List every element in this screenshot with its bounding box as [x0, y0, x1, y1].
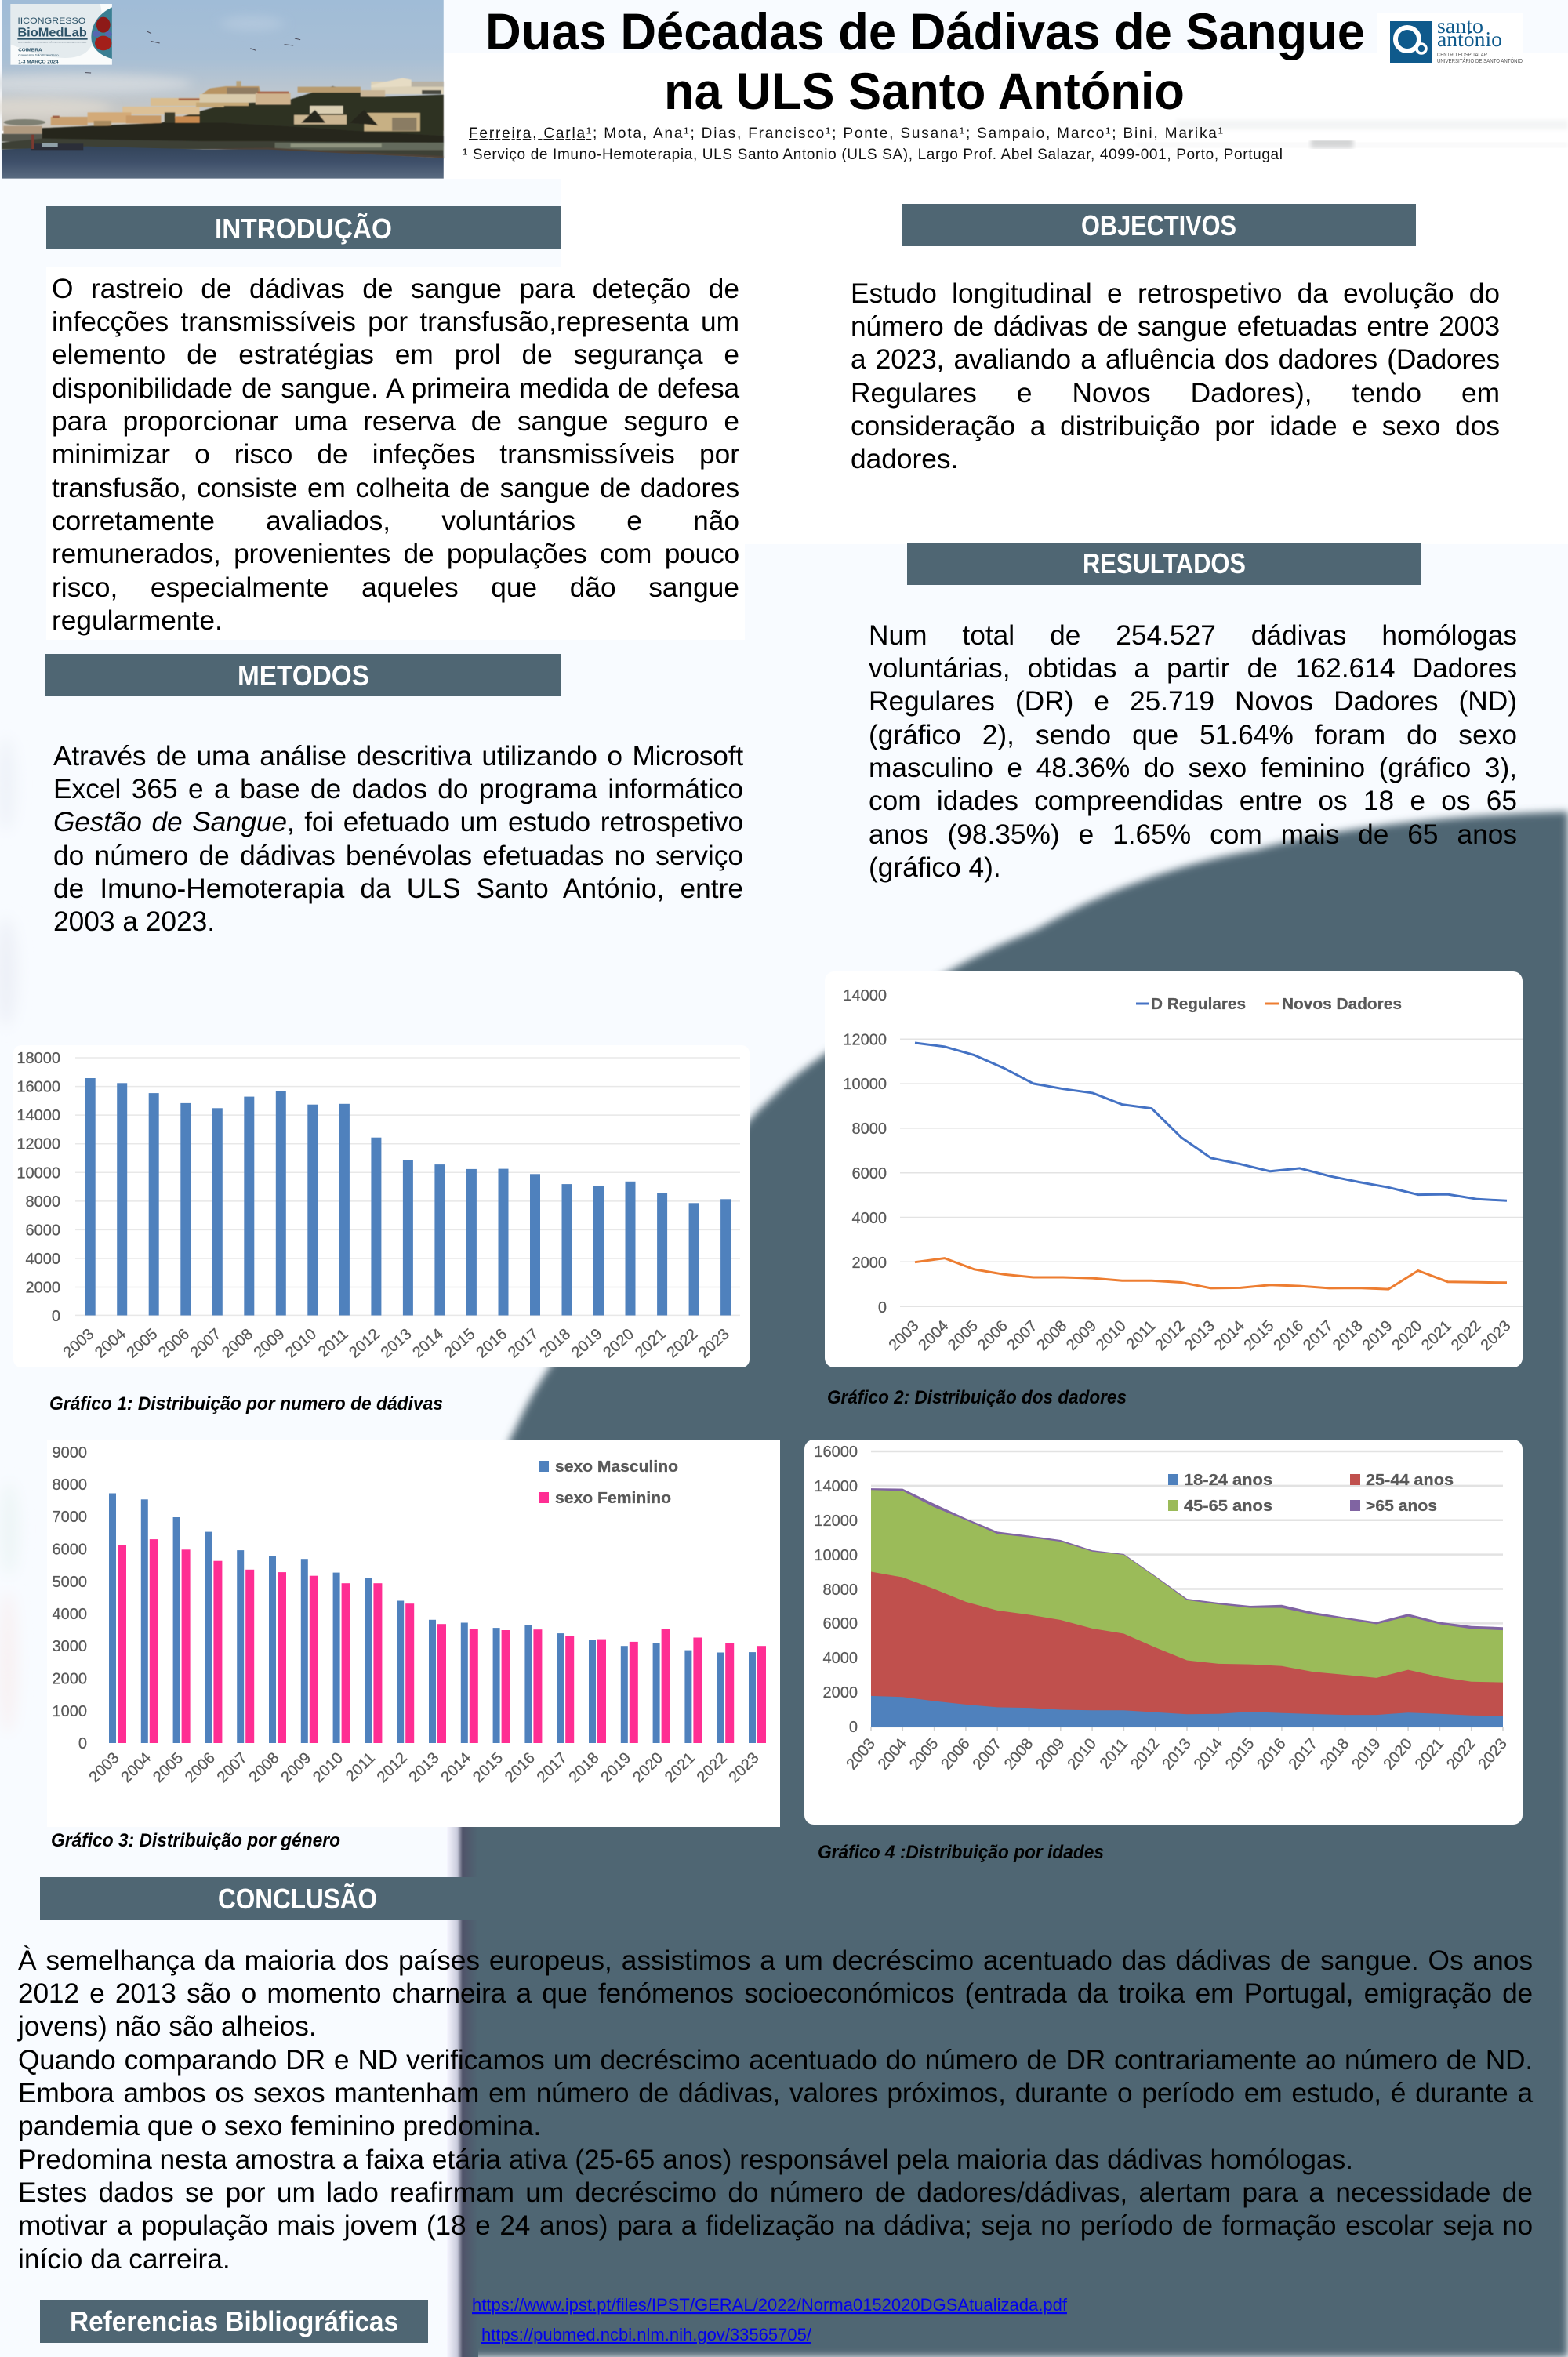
heading: Conclusão	[40, 1877, 472, 1920]
stacked area chart: Gráfico 4 age groups: 2021	[1412, 1735, 1447, 1773]
grouped bar chart: Gráfico 3 gender: 2007	[214, 1749, 251, 1786]
grouped bar chart: Gráfico 3 gender: 2004	[118, 1749, 154, 1786]
authors and affiliation: ¹ Serviço de Imuno-Hemoterapia, ULS Santo Antonio (ULS SA), Largo Prof. Abel Salazar, 4099-001, Porto, Portugal	[463, 147, 1283, 163]
text block: Metodos: do número de dádivas benévolas efetuadas no serviço	[53, 841, 743, 871]
legend	[1168, 1472, 1454, 1515]
stacked area chart: Gráfico 4 age groups: 2016	[1254, 1735, 1290, 1773]
text block: Objectivos: a 2023, avaliando a afluência dos dadores (Dadores	[851, 344, 1500, 375]
stacked area chart: Gráfico 4 age groups: 2013	[1159, 1735, 1195, 1773]
text block: Resultados: com idades compreendidas entre os 18 e os 65	[869, 786, 1517, 816]
grouped bar chart: Gráfico 3 gender: 2016	[502, 1749, 539, 1786]
stacked area chart: Gráfico 4 age groups: 2003	[843, 1735, 879, 1773]
text block: Conclusão: jovens) não são alheios.	[18, 2011, 317, 2042]
legend: sexo Masculino	[555, 1458, 678, 1476]
text block: Introdução: elemento de estratégias em prol de segurança e	[52, 340, 739, 370]
bar chart: Gráfico 1 donations per year: 8000	[25, 1193, 60, 1211]
text block: Introdução: infecções transmissíveis por transfusão,representa um	[52, 307, 739, 337]
text block: Objectivos: Estudo longitudinal e retrospetivo da evolução do	[851, 278, 1500, 309]
grouped bar chart: Gráfico 3 gender: 2010	[310, 1749, 347, 1786]
congress logo: IICONGRESSO	[17, 16, 85, 26]
legend: sexo Feminino	[555, 1490, 671, 1507]
bar chart: Gráfico 1 donations per year: 2022	[663, 1325, 701, 1361]
bar chart: Gráfico 1 donations per year: 2012	[346, 1325, 383, 1361]
line chart: Gráfico 2 donors: 2009	[1063, 1317, 1100, 1354]
text block: Objectivos: consideração a distribuição por idade e sexo dos	[851, 411, 1500, 441]
stacked area chart: Gráfico 4 age groups: 8000	[823, 1582, 858, 1599]
bar chart: Gráfico 1 donations per year: 10000	[16, 1164, 60, 1182]
text block: Objectivos	[851, 278, 1500, 474]
grouped bar chart: Gráfico 3 gender: 2011	[343, 1749, 379, 1785]
stacked area chart: Gráfico 4 age groups: 4000	[823, 1650, 858, 1667]
bar chart: Gráfico 1 donations per year: 16000	[16, 1079, 60, 1096]
stacked area chart: Gráfico 4 age groups: 16000	[814, 1444, 858, 1461]
text block: Resultados: anos (98.35%) e 1.65% com mais de 65 anos	[869, 819, 1517, 850]
legend: >65 anos	[1366, 1498, 1437, 1515]
stacked area chart: Gráfico 4 age groups: 14000	[814, 1478, 858, 1495]
text block: Objectivos: dadores.	[851, 444, 958, 474]
bar chart: Gráfico 1 donations per year: 2020	[600, 1325, 637, 1361]
line chart: Gráfico 2 donors: 2007	[1004, 1317, 1041, 1354]
grouped bar chart: Gráfico 3 gender: 2014	[437, 1749, 474, 1786]
stacked area chart: Gráfico 4 age groups: 2022	[1443, 1735, 1479, 1773]
grouped bar chart: Gráfico 3 gender: 8000	[52, 1476, 87, 1494]
stacked area chart: Gráfico 4 age groups: 2012	[1127, 1735, 1163, 1773]
heading: Objectivos: OBJECTIVOS	[1081, 209, 1236, 242]
line chart: Gráfico 2 donors: 2016	[1270, 1317, 1307, 1354]
bar chart: Gráfico 1 donations per year: 0	[52, 1308, 60, 1325]
bar chart: Gráfico 1 donations per year: 2016	[473, 1325, 510, 1361]
text block: Conclusão	[17, 1945, 1534, 2275]
line chart: Gráfico 2 donors: 2010	[1093, 1317, 1130, 1354]
line chart: Gráfico 2 donors: 4000	[851, 1210, 887, 1227]
line chart: Gráfico 2 donors: 2011	[1123, 1317, 1160, 1353]
text block: Conclusão: Quando comparando DR e ND verificamos um decréscimo acentuado do número de DR contrariamente ao número de ND.	[18, 2045, 1533, 2076]
heading: Metodos	[45, 654, 561, 696]
legend	[1136, 996, 1402, 1013]
stacked area chart: Gráfico 4 age groups: 2010	[1064, 1735, 1100, 1773]
stacked area chart: Gráfico 4 age groups: 2014	[1191, 1735, 1226, 1773]
stacked area chart: Gráfico 4 age groups: 2008	[1001, 1735, 1036, 1773]
line chart: Gráfico 2 donors: 14000	[843, 987, 887, 1004]
legend: 18-24 anos	[1184, 1472, 1272, 1489]
text block: Resultados: voluntárias, obtidas a partir de 162.614 Dadores	[869, 653, 1517, 684]
bar chart: Gráfico 1 donations per year: 6000	[25, 1222, 60, 1239]
grouped bar chart: Gráfico 3 gender: 2008	[246, 1749, 283, 1786]
text block: Introdução: risco, especialmente aqueles que dão sangue	[52, 572, 739, 603]
text block: Introdução: para proporcionar uma reserva de sangue seguro e	[52, 406, 739, 437]
text block: Metodos: de Imuno-Hemoterapia da ULS Santo António, entre	[53, 873, 743, 904]
stacked area chart: Gráfico 4 age groups: 2005	[906, 1735, 942, 1773]
stacked area chart: Gráfico 4 age groups: 2006	[938, 1735, 974, 1773]
bar chart: Gráfico 1 donations per year: 2017	[505, 1325, 543, 1361]
text block: Resultados: Num total de 254.527 dádivas homólogas	[869, 619, 1517, 651]
reference links: https://www.ipst.pt/files/IPST/GERAL/2022/Norma0152020DGSAtualizada.pdf	[472, 2295, 1068, 2315]
text block: Resultados	[869, 619, 1517, 883]
line chart: Gráfico 2 donors	[825, 971, 1523, 1367]
title: na ULS Santo António	[664, 62, 1185, 120]
line chart: Gráfico 2 donors: 2005	[945, 1317, 982, 1354]
caption: Gráfico 3: Gráfico 3: Distribuição por género	[51, 1830, 340, 1851]
stacked area chart: Gráfico 4 age groups: 2009	[1033, 1735, 1069, 1773]
stacked area chart: Gráfico 4 age groups: 2000	[823, 1684, 858, 1701]
stacked area chart: Gráfico 4 age groups: 12000	[814, 1513, 858, 1530]
line chart: Gráfico 2 donors: 2003	[886, 1317, 923, 1354]
bar chart: Gráfico 1 donations per year: 2015	[441, 1325, 479, 1361]
bar chart: Gráfico 1 donations per year: 2013	[378, 1325, 416, 1361]
heading: Referencias Bibliográficas	[40, 2300, 428, 2343]
congress logo	[10, 4, 112, 65]
legend	[539, 1458, 678, 1507]
text block: Conclusão: início da carreira.	[18, 2244, 230, 2275]
line chart: Gráfico 2 donors: 2000	[851, 1255, 887, 1272]
text block: Introdução: corretamente avaliados, voluntários e não	[52, 506, 739, 536]
authors and affiliation	[463, 125, 1283, 163]
text block: Conclusão: 2012 e 2013 são o momento charneira a que fenómenos socioeconómicos (entrada da troika em Portugal, emigração de	[18, 1978, 1533, 2009]
legend: 45-65 anos	[1184, 1498, 1272, 1515]
line chart: Gráfico 2 donors: 8000	[851, 1120, 887, 1138]
hospital logo: Santo António	[1390, 14, 1523, 64]
text block: Conclusão: À semelhança da maioria dos países europeus, assistimos a um decréscimo acentuado das dádivas de sangue. Os anos	[18, 1945, 1533, 1976]
stacked area chart: Gráfico 4 age groups: 2017	[1286, 1735, 1321, 1773]
stacked area chart: Gráfico 4 age groups: 2011	[1097, 1735, 1131, 1772]
line chart: Gráfico 2 donors: 2017	[1300, 1317, 1337, 1354]
grouped bar chart: Gráfico 3 gender: 2021	[662, 1749, 699, 1786]
line chart: Gráfico 2 donors: 2015	[1241, 1317, 1278, 1354]
line chart: Gráfico 2 donors: 2018	[1330, 1317, 1367, 1354]
grouped bar chart: Gráfico 3 gender: 7000	[52, 1509, 87, 1526]
text block: Resultados: (gráfico 4).	[869, 852, 1001, 883]
bar chart: Gráfico 1 donations per year: 2007	[187, 1325, 224, 1361]
bar chart: Gráfico 1 donations per year: 4000	[25, 1251, 60, 1268]
line chart: Gráfico 2 donors: 12000	[843, 1032, 887, 1049]
bar chart: Gráfico 1 donations per year: 2004	[92, 1325, 129, 1361]
congress logo: ASSOCIAÇÃO PORTUGUESA DE CIÊNCIAS BIOMÉDICAS LABORATORIAIS	[18, 42, 87, 44]
reference links	[472, 2295, 1068, 2344]
text block: Conclusão: Estes dados se por um lado reafirmam um decréscimo do número de dadores/dádivas, alertam para a necessidade de	[18, 2177, 1533, 2208]
title	[485, 2, 1365, 120]
bar chart: Gráfico 1 donations per year: 2019	[568, 1325, 606, 1361]
grouped bar chart: Gráfico 3 gender: 4000	[52, 1606, 87, 1623]
grouped bar chart: Gráfico 3 gender: 2022	[694, 1749, 731, 1786]
congress logo: BioMedLab	[17, 26, 87, 40]
text block: Resultados: Regulares (DR) e 25.719 Novos Dadores (ND)	[869, 686, 1517, 717]
grouped bar chart: Gráfico 3 gender: 2023	[726, 1749, 763, 1786]
text block: Introdução: disponibilidade de sangue. A primeira medida de defesa	[52, 373, 739, 404]
heading: Objectivos	[902, 204, 1416, 246]
grouped bar chart: Gráfico 3 gender: 2006	[182, 1749, 219, 1786]
stacked area chart: Gráfico 4 age groups	[804, 1440, 1523, 1825]
text block: Introdução: O rastreio de dádivas de sangue para deteção de	[52, 273, 739, 304]
line chart: Gráfico 2 donors: 2012	[1152, 1317, 1189, 1354]
text block: Resultados: (gráfico 2), sendo que 51.64% foram do sexo	[869, 720, 1517, 750]
grouped bar chart: Gráfico 3 gender: 1000	[52, 1703, 87, 1720]
bar chart: Gráfico 1 donations per year: 2005	[124, 1325, 161, 1361]
hospital logo: Santo António: CENTRO HOSPITALAR	[1437, 53, 1487, 58]
line chart: Gráfico 2 donors: 2004	[915, 1317, 952, 1354]
legend: 25-44 anos	[1366, 1472, 1454, 1489]
grouped bar chart: Gráfico 3 gender: 3000	[52, 1638, 87, 1655]
line chart: Gráfico 2 donors: 2021	[1418, 1317, 1455, 1354]
text block: Introdução	[52, 273, 740, 636]
text block: Introdução: transfusão, consiste em colheita de sangue de dadores	[52, 473, 739, 503]
photo: Coimbra riverside with congress logo	[0, 0, 445, 179]
text block: Metodos: Através de uma análise descritiva utilizando o Microsoft	[53, 740, 743, 772]
text block: Conclusão: pandemia que o sexo feminino predomina.	[18, 2111, 541, 2141]
stacked area chart: Gráfico 4 age groups: 10000	[814, 1547, 858, 1564]
stacked area chart: Gráfico 4 age groups: 2004	[875, 1735, 910, 1773]
stacked area chart: Gráfico 4 age groups: 2023	[1475, 1735, 1511, 1773]
line chart: Gráfico 2 donors: 2022	[1448, 1317, 1485, 1354]
bar chart: Gráfico 1 donations per year: 2023	[695, 1325, 733, 1361]
text block: Resultados: masculino e 48.36% do sexo feminino (gráfico 3),	[869, 753, 1517, 783]
legend: Novos Dadores	[1282, 996, 1402, 1013]
heading: Resultados	[907, 543, 1421, 585]
grouped bar chart: Gráfico 3 gender: 6000	[52, 1542, 87, 1559]
grouped bar chart: Gráfico 3 gender: 2003	[86, 1749, 123, 1786]
text block: Conclusão: Predomina nesta amostra a faixa etária ativa (25-65 anos) responsável pela maioria das dádivas homólogas.	[18, 2145, 1353, 2175]
congress logo: COIMBRA	[18, 48, 42, 53]
bar chart: Gráfico 1 donations per year: 2018	[536, 1325, 574, 1361]
bar chart: Gráfico 1 donations per year: 2009	[251, 1325, 288, 1361]
bar chart: Gráfico 1 donations per year: 14000	[16, 1107, 60, 1124]
bar chart: Gráfico 1 donations per year: 2006	[155, 1325, 193, 1361]
line chart: Gráfico 2 donors: 2008	[1033, 1317, 1070, 1354]
reference links: https://pubmed.ncbi.nlm.nih.gov/33565705/	[481, 2325, 812, 2344]
text block: Metodos	[53, 740, 743, 937]
text block: Introdução: regularmente.	[52, 605, 223, 636]
bar chart: Gráfico 1 donations per year: 12000	[16, 1136, 60, 1153]
grouped bar chart: Gráfico 3 gender: 2012	[374, 1749, 411, 1786]
authors and affiliation: Ferreira, Carla¹; Mota, Ana¹; Dias, Francisco¹; Ponte, Susana¹; Sampaio, Marco¹; Bini, Marika¹	[469, 125, 1223, 142]
line chart: Gráfico 2 donors: 2023	[1478, 1317, 1515, 1354]
bar chart: Gráfico 1 donations per year: 2011	[315, 1325, 352, 1360]
grouped bar chart: Gráfico 3 gender: 2000	[52, 1670, 87, 1687]
heading: Introdução: INTRODUÇÃO	[215, 212, 392, 245]
hospital logo: Santo António: antónio	[1437, 27, 1502, 51]
text block: Introdução: remunerados, provenientes de populações com pouco	[52, 539, 739, 569]
grouped bar chart: Gráfico 3 gender: 0	[78, 1735, 87, 1752]
stacked area chart: Gráfico 4 age groups: 2019	[1348, 1735, 1385, 1773]
legend: D Regulares	[1151, 996, 1246, 1013]
stacked area chart: Gráfico 4 age groups: 0	[849, 1719, 858, 1736]
grouped bar chart: Gráfico 3 gender: 2005	[150, 1749, 187, 1786]
grouped bar chart: Gráfico 3 gender: 9000	[52, 1444, 87, 1462]
bar chart: Gráfico 1 donations per year: 2000	[25, 1280, 60, 1297]
congress logo: 1-3 MARÇO 2024	[18, 60, 59, 64]
bar chart: Gráfico 1 donations per year	[16, 1050, 750, 1367]
grouped bar chart: Gráfico 3 gender: 2013	[406, 1749, 443, 1786]
stacked area chart: Gráfico 4 age groups: 2020	[1380, 1735, 1416, 1773]
grouped bar chart: Gráfico 3 gender: 2020	[630, 1749, 666, 1786]
stacked area chart: Gráfico 4 age groups: 2015	[1222, 1735, 1258, 1773]
line chart: Gráfico 2 donors: 0	[878, 1299, 887, 1317]
hospital logo: Santo António: santo	[1437, 14, 1483, 38]
text block: Objectivos: número de dádivas de sangue efetuadas entre 2003	[851, 311, 1500, 342]
stacked area chart: Gráfico 4 age groups: 2018	[1317, 1735, 1352, 1773]
heading: Resultados: RESULTADOS	[1083, 547, 1246, 579]
bar chart: Gráfico 1 donations per year: 2010	[282, 1325, 320, 1361]
grouped bar chart: Gráfico 3 gender: 2009	[278, 1749, 314, 1786]
heading: Introdução	[46, 206, 561, 249]
text block: Objectivos: Regulares e Novos Dadores), tendo em	[851, 378, 1500, 409]
bar chart: Gráfico 1 donations per year: 2021	[632, 1325, 670, 1361]
congress logo: Convento São Francisco	[18, 53, 59, 57]
grouped bar chart: Gráfico 3 gender	[52, 1440, 780, 1827]
bar chart: Gráfico 1 donations per year: 2014	[409, 1325, 447, 1361]
text block: Metodos: Excel 365 e a base de dados do programa informático	[53, 774, 743, 804]
heading: Referencias Bibliográficas: Referencias Bibliográficas	[70, 2305, 398, 2337]
stacked area chart: Gráfico 4 age groups: 2007	[970, 1735, 1005, 1773]
text block: Metodos: Gestão de Sangue, foi efetuado um estudo retrospetivo	[53, 807, 743, 837]
line chart: Gráfico 2 donors: 10000	[843, 1076, 887, 1093]
line chart: Gráfico 2 donors: 2020	[1388, 1317, 1425, 1354]
bar chart: Gráfico 1 donations per year: 18000	[16, 1050, 60, 1067]
text block: Conclusão: motivar a população mais jovem (18 e 24 anos) para a fidelização na dádiva; seja no período de formação escolar seja no	[18, 2210, 1533, 2241]
heading: Metodos: METODOS	[238, 659, 369, 692]
text block: Introdução: minimizar o risco de infeções transmissíveis por	[52, 439, 739, 470]
line chart: Gráfico 2 donors: 2006	[975, 1317, 1011, 1354]
text block: Conclusão: Embora ambos os sexos mantenham em número de dádivas, valores próximos, durante o período em estudo, é durante a	[18, 2078, 1533, 2108]
bar chart: Gráfico 1 donations per year: 2003	[60, 1325, 97, 1361]
line chart: Gráfico 2 donors: 2014	[1211, 1317, 1248, 1354]
line chart: Gráfico 2 donors: 6000	[851, 1165, 887, 1182]
stacked area chart: Gráfico 4 age groups: 6000	[823, 1615, 858, 1632]
title: Duas Décadas de Dádivas de Sangue	[485, 2, 1365, 60]
grouped bar chart: Gráfico 3 gender: 2018	[566, 1749, 603, 1786]
line chart: Gráfico 2 donors: 2019	[1359, 1317, 1396, 1354]
grouped bar chart: Gráfico 3 gender: 2019	[597, 1749, 634, 1786]
bar chart: Gráfico 1 donations per year: 2008	[219, 1325, 256, 1361]
text block: Metodos: 2003 a 2023.	[53, 906, 215, 937]
heading: Conclusão: CONCLUSÃO	[218, 1882, 377, 1915]
grouped bar chart: Gráfico 3 gender: 2015	[470, 1749, 506, 1786]
grouped bar chart: Gráfico 3 gender: 5000	[52, 1574, 87, 1591]
line chart: Gráfico 2 donors: 2013	[1181, 1317, 1218, 1354]
grouped bar chart: Gráfico 3 gender: 2017	[534, 1749, 571, 1786]
